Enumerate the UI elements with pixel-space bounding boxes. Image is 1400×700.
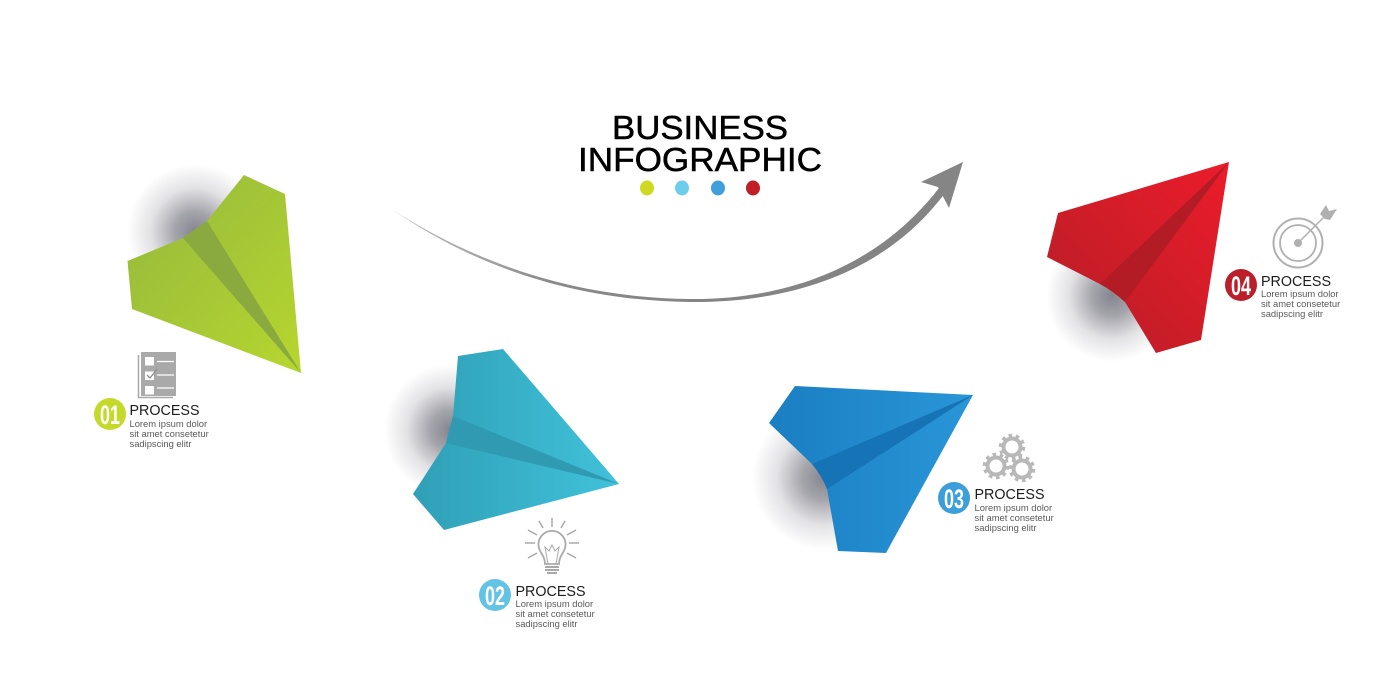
panel: plane 03 blue (752, 386, 973, 553)
icon: checklist (138, 352, 176, 398)
number badge: 02 (485, 581, 505, 611)
panel: plane 04 red (1046, 162, 1229, 362)
body text: sit amet consetetur (516, 608, 595, 619)
icon: gears (984, 436, 1034, 480)
number badge: 03 (944, 484, 964, 514)
body text: sadipscing elitr (974, 522, 1037, 533)
number badge: 04 (1231, 271, 1251, 301)
title: INFOGRAPHIC (578, 141, 822, 178)
colour dots (640, 180, 760, 196)
heading: PROCESS (974, 486, 1044, 503)
heading: PROCESS (516, 583, 586, 600)
plane shadow (752, 406, 896, 550)
body text: sit amet consetetur (1261, 298, 1340, 309)
title: BUSINESS (612, 109, 788, 146)
body text: sadipscing elitr (130, 438, 192, 449)
paper plane (128, 175, 301, 373)
body text: sit amet consetetur (130, 428, 209, 439)
number badge: 01 (100, 400, 120, 430)
body text: Lorem ipsum dolor (130, 418, 207, 429)
heading: PROCESS (1261, 273, 1331, 290)
step 04 label (1225, 269, 1340, 319)
curved arrow (393, 162, 963, 302)
paper plane (1047, 162, 1229, 353)
body text: Lorem ipsum dolor (1261, 288, 1339, 299)
step 02 label (479, 579, 595, 629)
plane shadow (384, 364, 516, 496)
body text: Lorem ipsum dolor (516, 598, 593, 609)
title (578, 109, 822, 178)
body text: sit amet consetetur (974, 512, 1054, 523)
paper plane (769, 386, 973, 553)
plane shadow (1046, 230, 1178, 362)
step 03 label (938, 482, 1054, 533)
panel: plane 01 green (127, 164, 301, 373)
step 01 label (94, 398, 209, 449)
plane shadow (127, 164, 263, 300)
icon: target (1274, 205, 1337, 268)
paper plane (413, 349, 619, 530)
body text: Lorem ipsum dolor (974, 502, 1052, 513)
panel: plane 02 teal (384, 349, 619, 530)
icon: light bulb (525, 518, 579, 573)
body text: sadipscing elitr (1261, 308, 1323, 319)
heading: PROCESS (130, 402, 200, 419)
body text: sadipscing elitr (516, 618, 578, 629)
